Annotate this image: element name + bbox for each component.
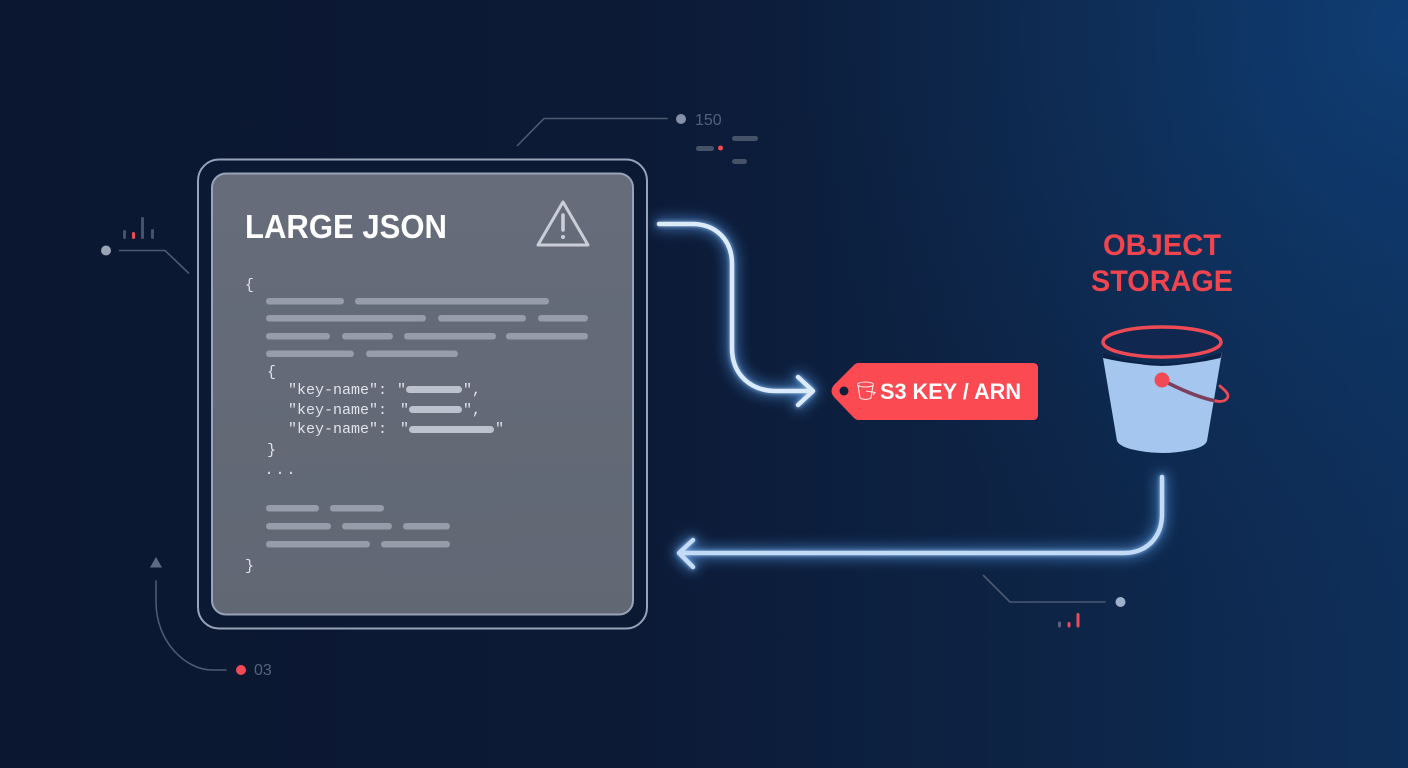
heading: object storage: OBJECT [1103,229,1221,262]
icon: small bucket [858,382,875,400]
annotation: left bars [101,217,188,273]
bucket rim [1103,327,1221,357]
text bars: upper block [266,298,588,357]
annotation: bottom-left 03 [150,557,272,679]
bucket handle [1168,383,1216,401]
code: nested object: " [495,421,504,438]
code: nested object: "key-name": [288,382,387,399]
code: nested object: { [267,364,276,381]
icon: warning triangle [538,202,588,245]
tag label: S3 KEY / ARN [880,379,1021,404]
code: closing brace: } [245,558,254,575]
code: nested object: "key-name": [288,421,387,438]
text bars: lower block [266,505,450,548]
tag: S3 key / ARN [832,363,1038,420]
code: nested object: " [400,402,409,419]
heading: LARGE JSON: LARGE JSON [245,208,447,245]
annotation: bottom-left 03: 03 [254,662,272,679]
code: nested object: " [400,421,409,438]
code: nested object: ", [463,402,481,419]
outer frame [198,160,647,628]
annotation: bottom-right bars [984,576,1126,628]
code: nested object [264,364,504,479]
arrow: storage back to JSON [679,477,1162,567]
code: nested object: } [267,442,276,459]
inner panel [212,174,633,614]
code: nested object: "key-name": [288,402,387,419]
annotation: top 150: 150 [695,112,722,129]
panel: large JSON document [198,160,647,628]
heading: object storage: STORAGE [1091,265,1233,298]
icon: bucket [1102,327,1228,453]
code: opening brace: { [245,277,254,294]
arrow: JSON to tag [659,224,813,405]
annotation: top 150 [518,112,758,164]
code: nested object: ... [264,462,298,479]
heading: object storage [1091,229,1233,298]
code: nested object: ", [463,382,481,399]
code: nested object: " [397,382,406,399]
